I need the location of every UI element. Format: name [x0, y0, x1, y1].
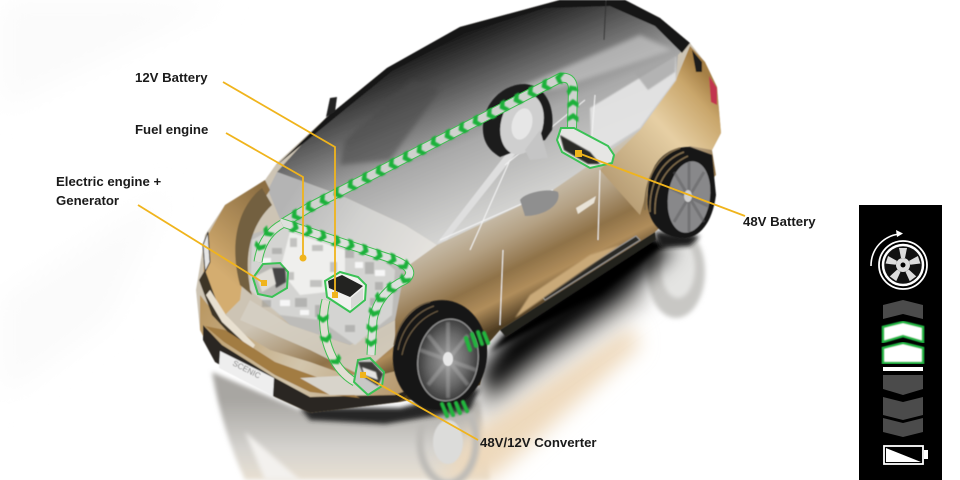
rear quarter panel — [600, 46, 721, 215]
gold bumper trim — [205, 326, 360, 398]
line: fuel engine — [226, 133, 306, 262]
path: loop from 12V battery to converter — [323, 300, 355, 382]
wheel arch dark — [235, 188, 272, 295]
fog lamp — [300, 375, 370, 395]
engine bay — [250, 224, 405, 345]
neutral bar — [883, 367, 923, 371]
component: electric engine — [253, 263, 288, 297]
front glass transparent bonnet — [240, 300, 395, 375]
front bumper — [200, 295, 425, 413]
chevrons: active charging — [883, 322, 923, 363]
front wing — [203, 180, 270, 315]
chevron: inactive top — [883, 300, 923, 319]
rear tyre — [648, 147, 716, 238]
roof light panels — [490, 35, 672, 100]
engine block — [250, 222, 395, 345]
antenna — [604, 0, 606, 40]
label: Electric engine + Generator: Generator — [56, 193, 119, 208]
label: 48V/12V Converter: 48V/12V Converter — [480, 435, 597, 450]
sill — [500, 232, 656, 337]
wing mirror near windscreen — [326, 97, 337, 117]
label: Electric engine + Generator: Electric engine + — [56, 174, 161, 189]
door highlight streak — [515, 245, 620, 318]
green energy paths — [258, 78, 573, 382]
shadow under car — [300, 232, 700, 424]
tyre ribs — [394, 302, 438, 355]
spare wheel — [483, 84, 553, 160]
rear rim — [663, 158, 715, 236]
white A-pillar — [437, 127, 537, 243]
path: hood run to 12V battery and converter — [280, 222, 410, 355]
roof black edge — [277, 0, 690, 165]
rim — [413, 315, 483, 405]
hood — [268, 172, 437, 268]
label: 12V Battery: 12V Battery — [135, 70, 208, 85]
side window glass — [590, 56, 676, 158]
headlight — [203, 232, 210, 272]
line: converter — [360, 372, 478, 440]
door mirror — [520, 190, 559, 216]
floor sheen top left — [0, 0, 230, 400]
tail light — [709, 76, 717, 105]
car body silhouette — [196, 0, 721, 413]
rear side dark recess — [692, 50, 702, 72]
greenhouse glass — [277, 0, 690, 245]
grille chrome — [199, 270, 250, 345]
tyre — [386, 294, 494, 416]
line: 48V battery — [575, 150, 745, 216]
component: 12V battery — [325, 272, 366, 312]
chevrons: inactive lower — [883, 375, 923, 437]
rim spokes — [420, 322, 476, 398]
component: 48V/12V converter — [354, 358, 384, 395]
rear tyre ribs — [645, 148, 688, 214]
callout lines — [138, 82, 745, 440]
icon: rotating wheel — [871, 230, 927, 289]
door handle — [576, 196, 596, 214]
sill trim — [541, 236, 640, 300]
floor reflection of car — [212, 226, 705, 480]
line: 12V battery — [223, 82, 338, 298]
lower black lip — [203, 325, 420, 413]
panel background — [859, 205, 942, 480]
front wheel — [386, 294, 494, 416]
component: 48V battery — [557, 128, 614, 168]
number plate: SCENIC — [231, 359, 262, 381]
line: electric engine — [138, 205, 267, 286]
rear wheel — [645, 147, 716, 238]
regeneration waves by front wheel — [442, 332, 488, 416]
label: Fuel engine: Fuel engine — [135, 122, 208, 137]
icon: battery charge level — [884, 446, 928, 464]
car — [196, 0, 721, 413]
path: roof run to 48V battery — [285, 78, 573, 222]
status panel — [859, 205, 942, 480]
path: to electric engine — [258, 224, 282, 262]
dashboard shape — [340, 80, 440, 165]
label: 48V Battery: 48V Battery — [743, 214, 816, 229]
number plate — [219, 351, 274, 396]
